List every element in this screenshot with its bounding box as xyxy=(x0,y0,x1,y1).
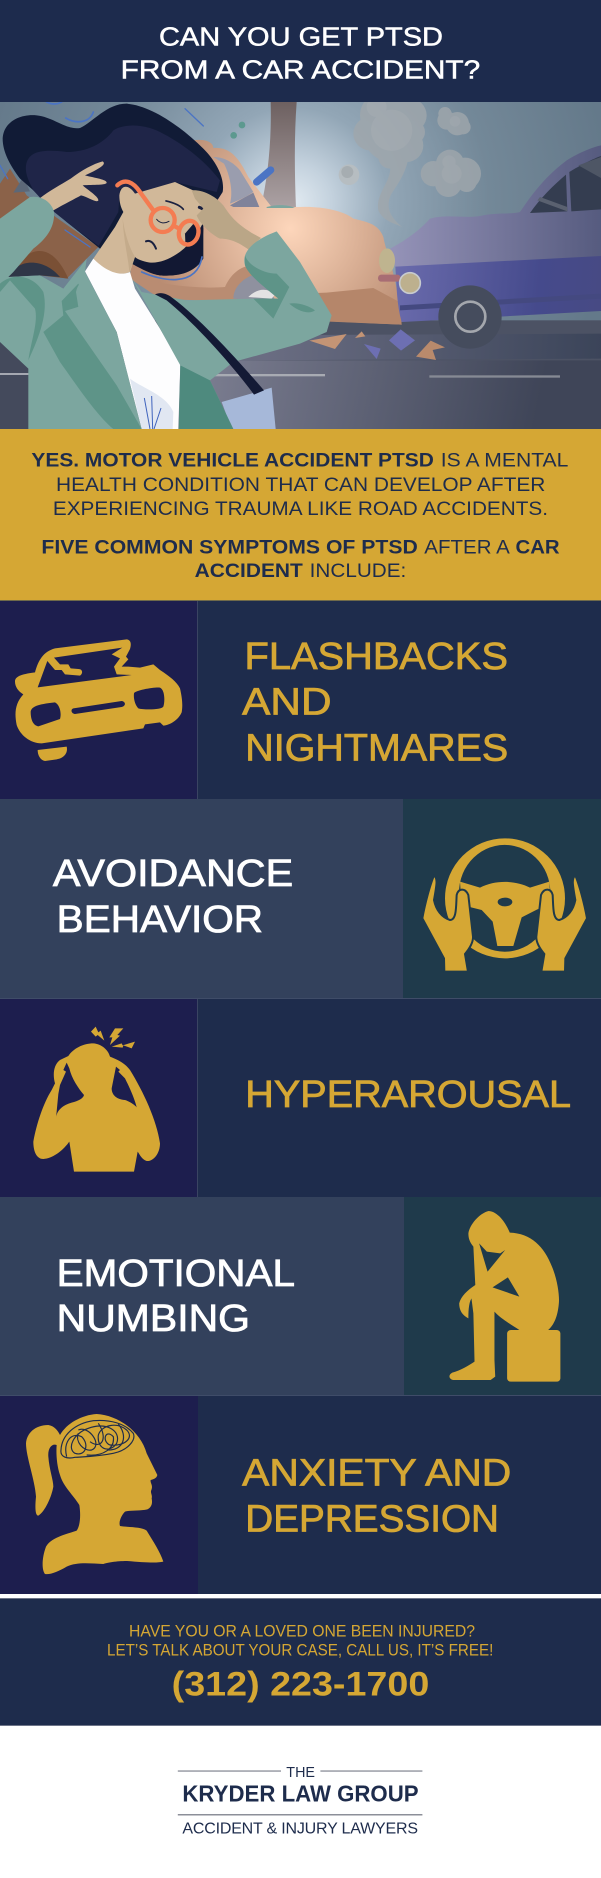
ground xyxy=(0,320,601,429)
hair front xyxy=(26,126,220,246)
phone number: (312) 223-1700 xyxy=(172,1666,429,1704)
blue car xyxy=(390,145,601,322)
lights and bumper xyxy=(378,248,420,293)
glasses xyxy=(117,182,201,247)
logo: Kryder Law Group xyxy=(178,1764,422,1838)
bag strap xyxy=(155,293,264,395)
title banner xyxy=(0,0,601,102)
label xyxy=(57,1253,295,1340)
lower hair xyxy=(135,228,204,276)
call to action text: LET’S TALK ABOUT YOUR CASE, CALL US, IT’S FREE! xyxy=(107,1642,493,1660)
sky background xyxy=(0,102,601,320)
bag xyxy=(222,388,276,429)
intro text: EXPERIENCING TRAUMA LIKE ROAD ACCIDENTS. xyxy=(53,498,548,520)
dark lens shadow xyxy=(184,224,196,242)
label: ANXIETY AND xyxy=(242,1453,511,1495)
brain scribble xyxy=(61,1420,134,1458)
label: HYPERAROUSAL xyxy=(245,1074,571,1116)
intro text: YES. MOTOR VEHICLE ACCIDENT PTSD xyxy=(31,450,434,472)
logo: Kryder Law Group: KRYDER LAW GROUP xyxy=(182,1780,419,1806)
brown car rear xyxy=(0,169,98,279)
symptom 3: hyperarousal xyxy=(0,998,601,1197)
intro text: FIVE COMMON SYMPTOMS OF PTSD xyxy=(41,536,418,558)
symptom 4: emotional numbing xyxy=(0,1197,601,1395)
intro panel xyxy=(0,429,601,600)
call to action text xyxy=(107,1623,493,1660)
icon: crashed car xyxy=(15,639,182,761)
label: FLASHBACKS xyxy=(244,636,508,678)
jacket right and sleeve xyxy=(132,231,332,429)
white shirt xyxy=(85,259,180,429)
call to action text: HAVE YOU OR A LOVED ONE BEEN INJURED? xyxy=(129,1623,475,1641)
neck shadow xyxy=(123,222,135,271)
icon: sitting person xyxy=(449,1211,560,1382)
title banner: FROM A CAR ACCIDENT? xyxy=(121,55,480,85)
symptom 2: avoidance behavior xyxy=(0,799,601,998)
label xyxy=(53,853,293,941)
intro text: CAR xyxy=(516,536,560,558)
intro text xyxy=(31,450,569,582)
call to action panel xyxy=(0,1598,601,1726)
symptom 5: anxiety and depression xyxy=(0,1395,601,1594)
intro text: INCLUDE: xyxy=(310,560,406,582)
wheel xyxy=(438,285,502,349)
symptom 1: flashbacks and nightmares xyxy=(0,600,601,799)
logo: Kryder Law Group: ACCIDENT & INJURY LAWYERS xyxy=(182,1821,418,1838)
title banner: CAN YOU GET PTSD xyxy=(159,21,443,51)
intro text: HEALTH CONDITION THAT CAN DEVELOP AFTER xyxy=(56,474,545,496)
icon: person holding head xyxy=(33,1027,160,1172)
logo: Kryder Law Group: THE xyxy=(286,1764,315,1781)
illustration: woman in distress at a car crash xyxy=(0,92,601,429)
teal dots xyxy=(230,122,245,139)
small smoke puff xyxy=(339,164,359,185)
label xyxy=(242,1453,511,1541)
hand on forehead xyxy=(192,190,261,249)
tree trunk xyxy=(261,102,297,209)
icon: hands on steering wheel xyxy=(422,838,587,972)
debris shards xyxy=(309,329,445,360)
label: AND xyxy=(242,682,332,724)
orange car xyxy=(130,140,402,325)
decorative squiggles xyxy=(0,102,271,280)
hand on head xyxy=(39,161,107,210)
label: EMOTIONAL xyxy=(57,1253,295,1295)
intro text: ACCIDENT xyxy=(195,560,303,582)
intro text: IS A MENTAL xyxy=(441,450,569,472)
smoke xyxy=(353,92,481,227)
face details xyxy=(146,201,208,249)
intro text: AFTER A xyxy=(424,536,510,558)
label: AVOIDANCE xyxy=(53,853,293,895)
label: NUMBING xyxy=(57,1298,250,1340)
label xyxy=(242,636,508,770)
label: NIGHTMARES xyxy=(245,728,508,770)
face and neck xyxy=(93,182,212,274)
label: BEHAVIOR xyxy=(57,899,263,941)
hair back xyxy=(3,104,223,276)
label: DEPRESSION xyxy=(245,1499,499,1541)
jacket left xyxy=(0,197,142,429)
icon: pain bolts xyxy=(91,1027,135,1048)
icon: head with tangled brain xyxy=(26,1414,163,1574)
